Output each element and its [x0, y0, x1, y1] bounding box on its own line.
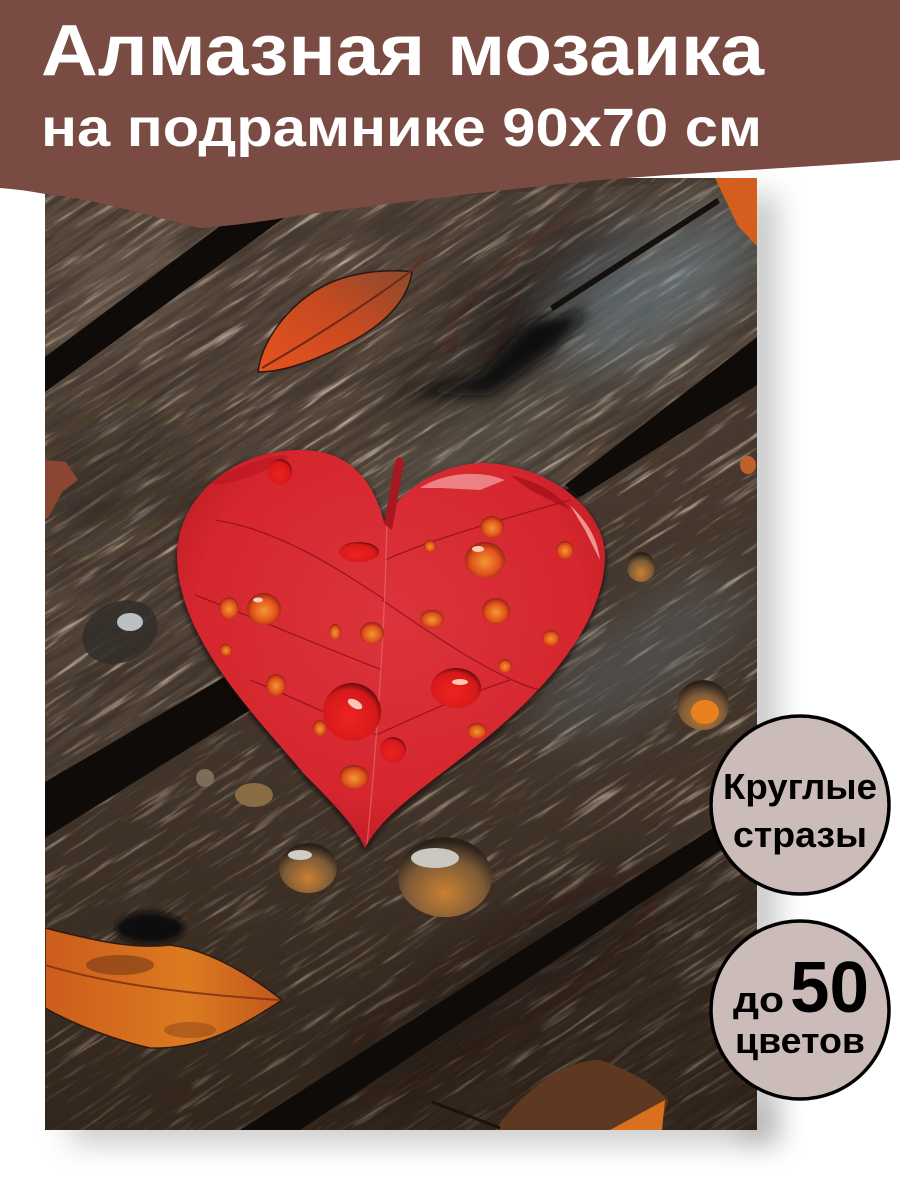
plank: lower middle: [45, 362, 757, 1130]
wet knot dark: [400, 310, 590, 395]
photo canvas: wet wooden planks: [19, 176, 790, 1130]
plank: upper middle: [45, 178, 757, 810]
wood grain highlights: [45, 178, 757, 1130]
stem: [384, 457, 404, 530]
badge: round rhinestones: Круглые: [723, 766, 877, 807]
wood grain darks: [45, 178, 757, 1130]
tonal patches: [19, 176, 790, 1119]
heart leaf: [170, 445, 610, 855]
leaf: top orange: [258, 254, 426, 372]
leaf: bottom right dark: [432, 1060, 668, 1130]
leaf: top right corner: [715, 178, 757, 246]
badge: up to 50 colours: до: [733, 979, 784, 1020]
title: Алмазная мозаика: [41, 11, 765, 91]
plank: bottom right: [245, 810, 757, 1130]
badge: up to 50 colours: 50: [790, 948, 869, 1028]
badge: up to 50 colours: [711, 921, 889, 1099]
badge: round rhinestones: стразы: [733, 814, 867, 855]
heart leaf gloss: [420, 474, 505, 490]
plank: top left: [45, 194, 219, 354]
header banner: [0, 0, 900, 228]
water droplets on heart: [219, 459, 574, 789]
heart leaf veins: [195, 500, 570, 735]
leaf: left edge small: [45, 460, 78, 518]
badge: up to 50 colours: цветов: [735, 1020, 865, 1061]
plank gaps: [45, 198, 757, 1130]
knot mark near lower left leaf: [116, 912, 184, 944]
lower darkening: [45, 623, 757, 1130]
canvas shadow: [70, 195, 775, 1142]
subtitle: на подрамнике 90х70 см: [41, 98, 762, 158]
heart midrib: [367, 520, 387, 845]
leaf: bottom left orange: [45, 928, 282, 1048]
badge: round rhinestones: [711, 716, 889, 894]
water droplets on wood: [72, 456, 756, 917]
